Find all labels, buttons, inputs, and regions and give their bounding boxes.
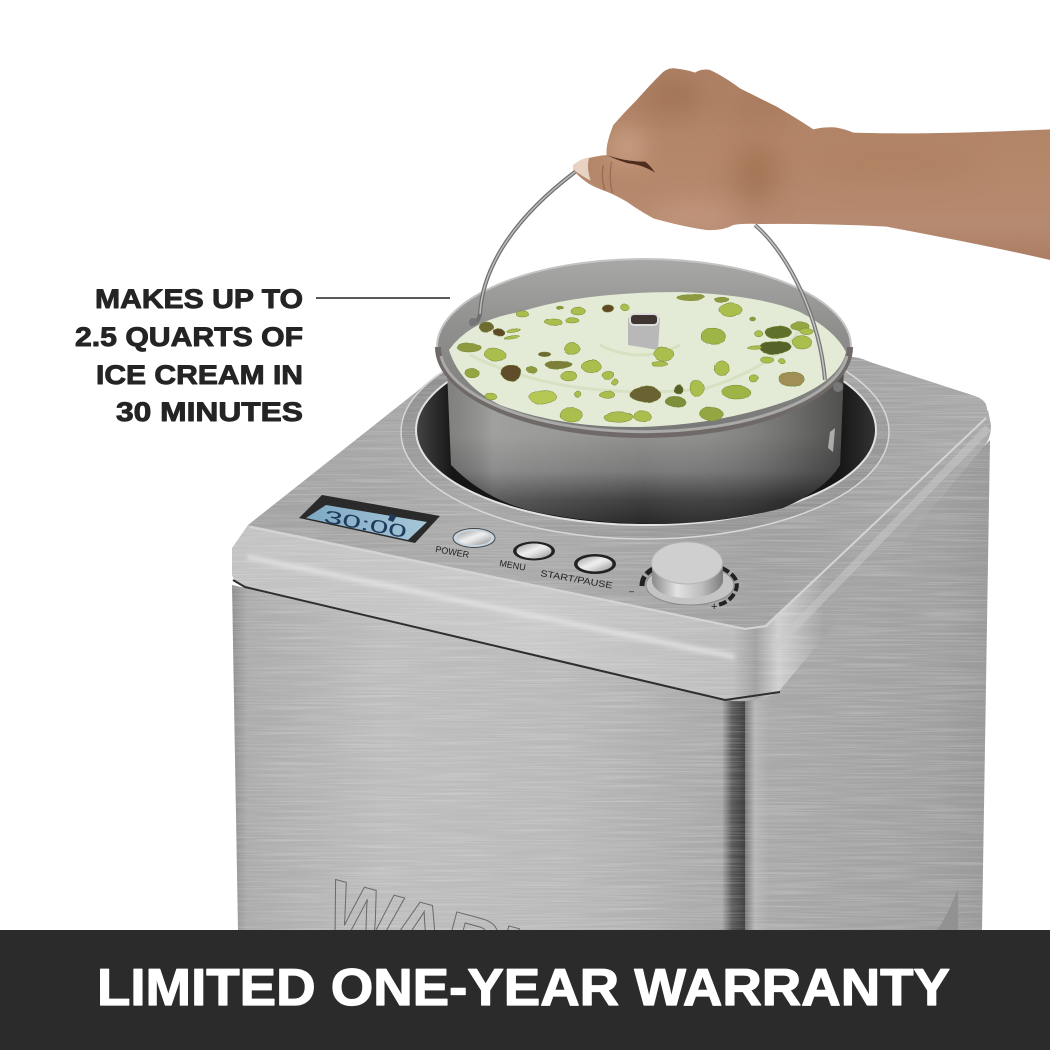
lid front edge highlight — [250, 418, 986, 629]
menu button — [513, 542, 555, 560]
callout text: capacity: 30 MINUTES — [116, 397, 303, 427]
well opening — [416, 335, 876, 525]
callout leader line — [316, 297, 450, 299]
bowl front lip — [438, 347, 850, 435]
power button — [453, 528, 495, 548]
callout text: capacity: ICE CREAM IN — [96, 360, 303, 390]
well ring highlights — [401, 325, 889, 539]
finger fold — [607, 155, 655, 173]
lid crease highlight — [247, 557, 735, 657]
callout text: capacity — [75, 284, 303, 427]
thumb creases — [602, 162, 613, 193]
thumb nail — [573, 157, 591, 181]
temperature dial — [642, 542, 737, 605]
vent on side panel — [937, 888, 958, 930]
handle pivot left — [469, 318, 477, 326]
ice cream — [449, 292, 846, 427]
callout text: capacity: MAKES UP TO — [95, 284, 303, 314]
bowl lip highlight — [441, 356, 847, 432]
button labels: POWER — [435, 544, 470, 560]
bowl scuff highlight — [828, 428, 835, 452]
ice cream swirl shading — [470, 330, 800, 392]
brushed steel housing — [232, 324, 991, 930]
button labels — [435, 544, 717, 613]
lid skirt — [232, 410, 991, 701]
button labels: – — [629, 586, 634, 596]
embossed brand name: WARING — [318, 864, 636, 1026]
right side panel of body — [745, 440, 990, 930]
warranty banner — [0, 930, 1050, 1050]
control panel — [299, 495, 737, 613]
well ring — [400, 324, 890, 540]
callout text: capacity: 2.5 QUARTS OF — [75, 322, 303, 352]
button labels: MENU — [499, 558, 526, 573]
appliance: ice cream maker — [232, 172, 991, 1026]
bowl inner wall — [437, 259, 851, 435]
bowl handle wire — [470, 172, 825, 380]
button labels: + — [711, 601, 717, 613]
pistachio pieces — [457, 295, 813, 422]
front panel of body — [232, 585, 745, 930]
dasher centre post — [628, 314, 660, 350]
lid top surface — [248, 357, 987, 629]
LCD display: 30:00 — [322, 506, 409, 542]
arm holding the handle — [573, 68, 1050, 260]
warranty text: LIMITED ONE-YEAR WARRANTY — [97, 959, 950, 1017]
lid right bevel highlight — [772, 428, 988, 650]
button labels: START/PAUSE — [540, 568, 613, 591]
start pause button — [574, 554, 616, 574]
skin shading — [574, 80, 782, 224]
bowl body — [446, 345, 845, 524]
LCD display — [299, 495, 440, 543]
handle pivot right — [833, 382, 843, 392]
lid seam — [233, 580, 780, 700]
